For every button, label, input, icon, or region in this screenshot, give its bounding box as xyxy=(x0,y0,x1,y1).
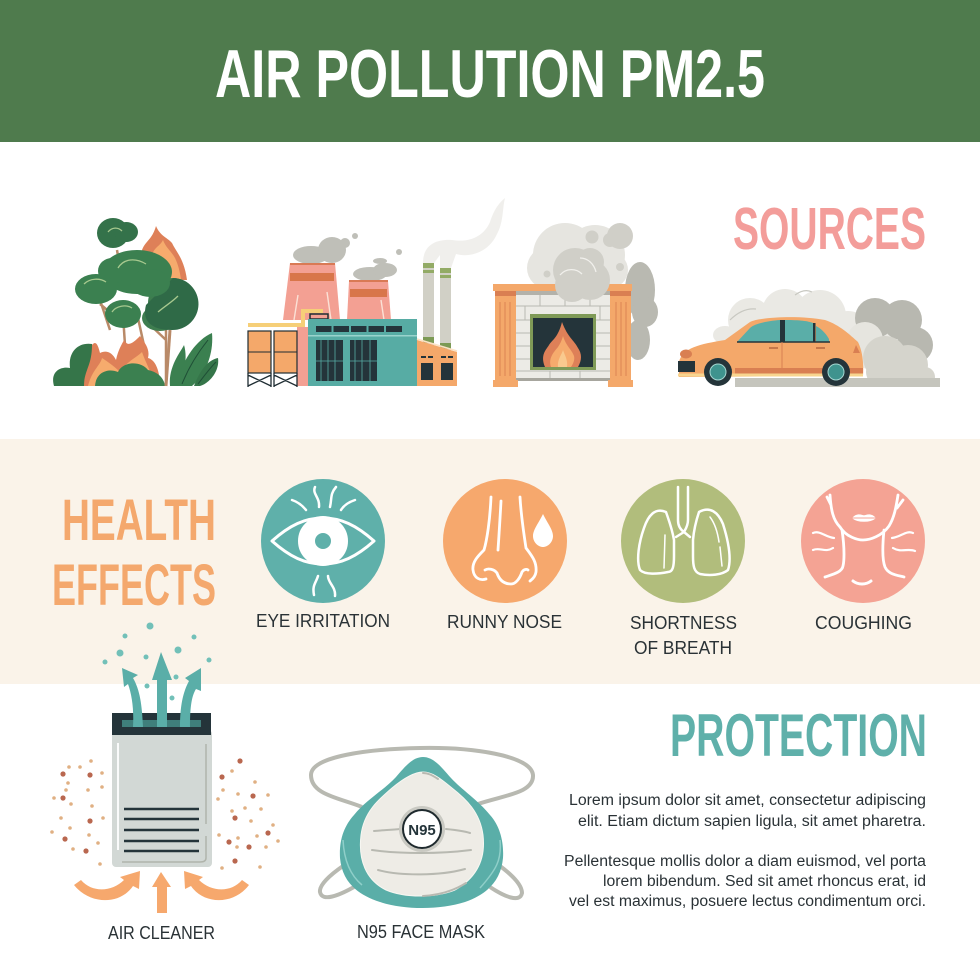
label: air cleaner: AIR CLEANER xyxy=(108,923,215,943)
panel: sources xyxy=(53,196,940,387)
building xyxy=(308,319,417,386)
heading: health effects xyxy=(52,488,216,618)
storage tanks xyxy=(248,331,297,387)
text block: protection description: Pellentesque mollis dolor a diam euismod, vel porta xyxy=(564,853,926,870)
illustration: factory xyxy=(248,198,505,387)
text block: protection description: elit. Etiam dictum sapien ligula, sit amet pharetra. xyxy=(578,813,926,830)
panel: health effects band xyxy=(0,439,980,684)
icon: runny nose xyxy=(443,479,567,603)
body xyxy=(112,730,212,867)
icon: n95 mask xyxy=(311,748,533,908)
illustration: car with exhaust xyxy=(678,289,940,387)
flame xyxy=(543,322,581,367)
clean air dots xyxy=(102,622,212,700)
heading: health effects: HEALTH xyxy=(62,488,216,553)
particles xyxy=(60,758,271,864)
straps xyxy=(311,748,533,807)
illustration: fireplace with smoke xyxy=(493,223,658,387)
icon: lungs xyxy=(621,479,745,603)
label: eye irritation: EYE IRRITATION xyxy=(256,610,390,631)
filter xyxy=(360,772,484,896)
pipe xyxy=(248,311,323,325)
label: n95 badge: N95 xyxy=(408,822,436,839)
label: n95 face mask: N95 FACE MASK xyxy=(357,922,485,942)
illustration: forest fire xyxy=(53,218,218,386)
header band xyxy=(0,0,980,142)
icon: eye irritation xyxy=(261,479,385,603)
label: coughing: COUGHING xyxy=(815,612,912,633)
label: shortness of breath: SHORTNESS xyxy=(630,612,737,633)
label: runny nose: RUNNY NOSE xyxy=(447,611,562,632)
text block: protection description: Lorem ipsum dolor sit amet, consectetur adipiscing xyxy=(569,792,926,809)
text block: protection description xyxy=(564,792,926,910)
label: shortness of breath: OF BREATH xyxy=(634,637,732,658)
text block: protection description: vel est maximus, posuere lectus condimentum orci. xyxy=(569,893,926,910)
arrows: dirty air in xyxy=(74,871,249,913)
icon: air cleaner xyxy=(50,622,280,913)
label: shortness of breath xyxy=(630,612,737,658)
arrows: clean air out xyxy=(122,652,201,727)
heading: health effects: EFFECTS xyxy=(52,553,216,618)
panel: protection xyxy=(50,622,927,943)
title: AIR POLLUTION PM2.5 xyxy=(215,36,765,112)
smoke plume xyxy=(423,198,505,268)
shell xyxy=(340,757,503,908)
text block: protection description: lorem bibendum. Sed sit amet rhoncus erat, id xyxy=(603,873,926,890)
smokestacks xyxy=(423,263,451,352)
icon: coughing xyxy=(801,479,925,603)
